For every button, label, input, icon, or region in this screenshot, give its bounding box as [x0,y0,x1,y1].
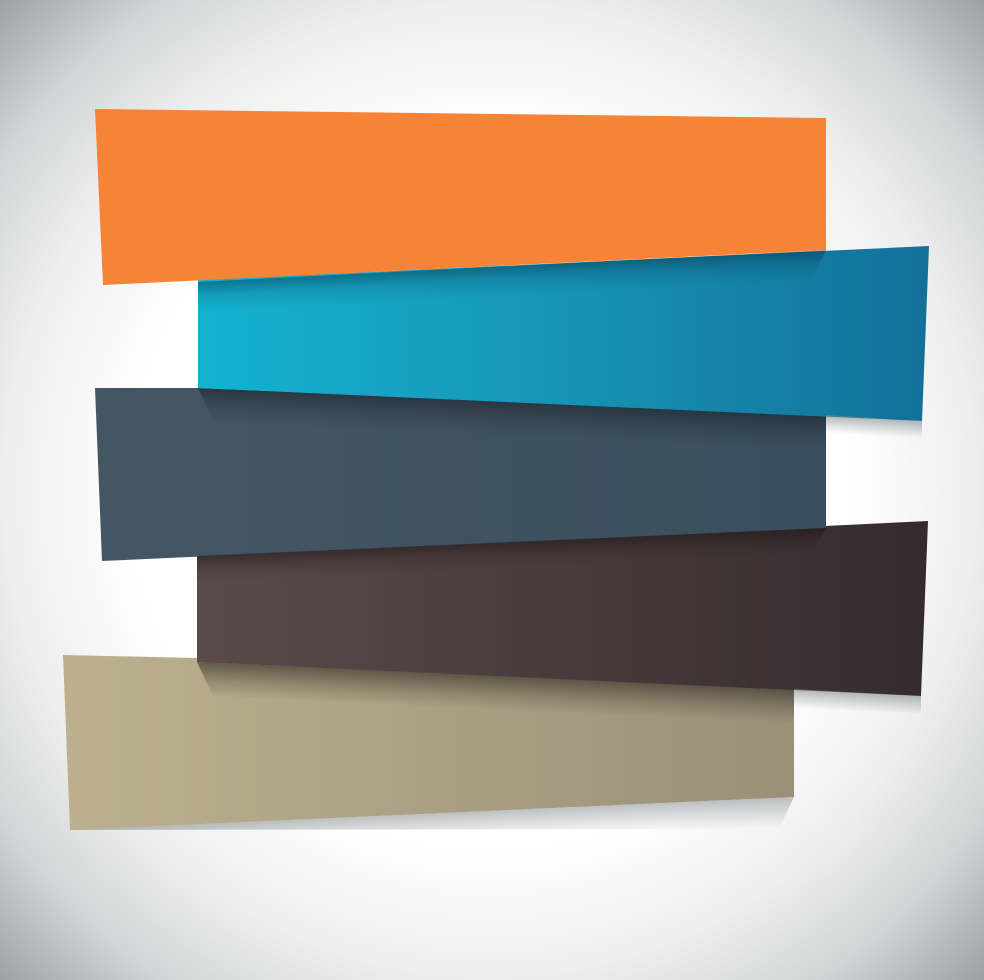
banner 2: blue strip [198,246,929,438]
shadow cast below tan strip [70,797,794,830]
banner 1: orange strip [95,109,826,285]
banner 4: brown strip [197,521,928,713]
banner 3: slate strip [95,388,826,586]
shadow cast by blue strip on slate strip [198,388,826,451]
shadow right of tan strip below brown strip [794,689,921,713]
shadow cast by brown strip on tan strip [197,662,794,724]
shadow below blue strip on background [826,415,922,438]
shadow cast by slate strip on brown strip [197,528,826,586]
shadow cast by orange strip on blue strip [198,250,826,312]
banner 5: tan strip [63,655,794,830]
